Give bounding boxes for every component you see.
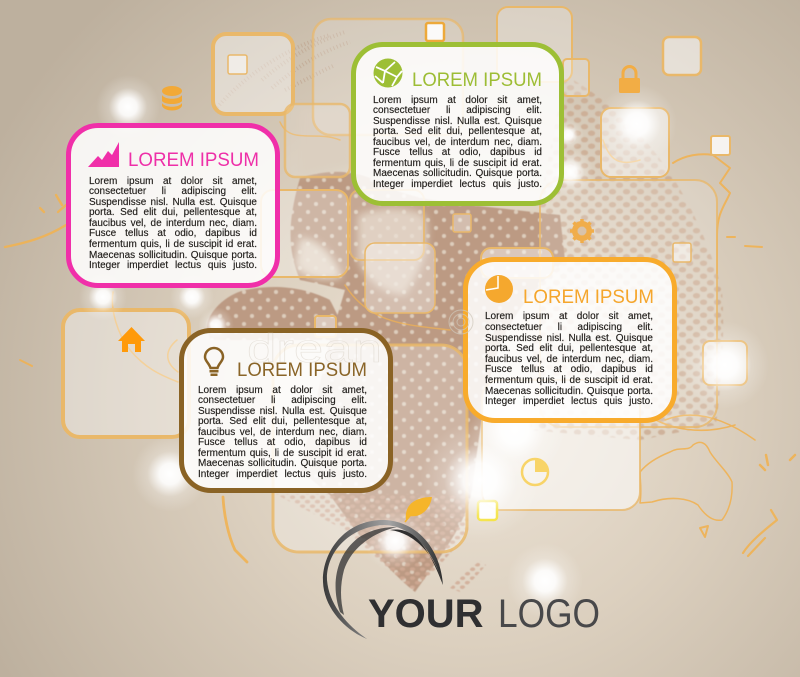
- text block: green: Lorem ipsum at dolor sit amet,: [373, 95, 542, 106]
- text block: green: faucibus vel, de interdum nec, diam.: [373, 137, 542, 148]
- text block: pink: fermentum quis, li de suscipit id erat.: [89, 239, 257, 250]
- text block: green: Suspendisse nisl. Nulla est. Quisque: [373, 116, 542, 127]
- text block: pink: Suspendisse nisl. Nulla est. Quisque: [89, 197, 257, 208]
- icon: globe: [374, 58, 402, 88]
- text block: pink: Lorem ipsum at dolor sit amet,: [89, 176, 257, 186]
- orange world map outlines: [5, 122, 795, 562]
- heading: green: LOREM IPSUM: [412, 69, 542, 91]
- text block: green: Fusce tellus at odio, dapibus id: [373, 147, 542, 158]
- text block: green: Maecenas sollicitudin. Quisque porta.: [373, 168, 542, 179]
- text block: green: [373, 95, 542, 190]
- translucent rounded tiles: [63, 7, 747, 552]
- text block: pink: faucibus vel, de interdum nec, diam.: [89, 218, 257, 229]
- watermark: drean: [247, 327, 382, 371]
- icon: gear: [570, 219, 594, 243]
- icon: padlock: [619, 67, 640, 93]
- text block: orange: Lorem ipsum at dolor sit amet,: [485, 311, 653, 322]
- logo text: YOUR: [368, 592, 484, 636]
- panel: green card: [351, 42, 564, 206]
- text block: green: porta. Sed elit dui, pellentesque at,: [373, 126, 542, 137]
- text block: brown: Integer imperdiet lectus quis justo.: [198, 469, 367, 480]
- text block: pink: porta. Sed elit dui, pellentesque at,: [89, 207, 257, 218]
- text block: orange: porta. Sed elit dui, pellentesque at,: [485, 343, 653, 354]
- text block: pink: Maecenas sollicitudin. Quisque porta.: [89, 250, 257, 261]
- text block: brown: fermentum quis, li de suscipit id erat.: [198, 448, 367, 459]
- text block: brown: Fusce tellus at odio, dapibus id: [198, 437, 367, 448]
- halftone globe: [207, 75, 723, 592]
- text block: orange: fermentum quis, li de suscipit id erat.: [485, 375, 653, 386]
- icon: mountain chart: [88, 142, 119, 167]
- icon: leaf: [405, 497, 432, 522]
- icon: pie chart: [485, 275, 513, 303]
- pale sea patches: [295, 108, 428, 295]
- logo swoosh: [323, 520, 443, 639]
- text block: orange: faucibus vel, de interdum nec, diam.: [485, 354, 653, 365]
- heading: brown: LOREM IPSUM: [237, 359, 367, 381]
- panel: pink card: [66, 123, 280, 288]
- text block: orange: Integer imperdiet lectus quis justo.: [485, 396, 653, 407]
- icon: house: [118, 327, 145, 352]
- light flares: [79, 75, 769, 619]
- logo text: LOGO: [498, 592, 600, 636]
- icon: pie ring: [522, 459, 548, 485]
- text block: green: Integer imperdiet lectus quis justo.: [373, 179, 542, 190]
- text block: pink: consectetuer li adipiscing elit.: [89, 186, 257, 197]
- text block: orange: Suspendisse nisl. Nulla est. Quisque: [485, 333, 653, 344]
- text block: orange: Maecenas sollicitudin. Quisque porta.: [485, 386, 653, 397]
- icon: database: [162, 86, 182, 110]
- text block: brown: Suspendisse nisl. Nulla est. Quisque: [198, 406, 367, 417]
- text block: brown: porta. Sed elit dui, pellentesque at,: [198, 416, 367, 427]
- text block: brown: faucibus vel, de interdum nec, diam.: [198, 427, 367, 438]
- text block: green: consectetuer li adipiscing elit.: [373, 105, 542, 116]
- text block: pink: Fusce tellus at odio, dapibus id: [89, 228, 257, 239]
- heading: pink: LOREM IPSUM: [128, 149, 259, 171]
- text block: orange: Fusce tellus at odio, dapibus id: [485, 364, 653, 375]
- text block: green: fermentum quis, li de suscipit id erat.: [373, 158, 542, 169]
- icon: light bulb: [204, 346, 224, 376]
- text block: orange: [485, 311, 653, 407]
- text block: brown: consectetuer li adipiscing elit.: [198, 395, 367, 406]
- text block: pink: [89, 176, 257, 271]
- hatched globe edge: [215, 32, 350, 110]
- text block: brown: Maecenas sollicitudin. Quisque porta.: [198, 458, 367, 469]
- logo text: [368, 592, 600, 636]
- panel: orange card: [463, 257, 677, 423]
- text block: brown: [198, 385, 367, 480]
- heading: orange: LOREM IPSUM: [523, 286, 654, 308]
- text block: brown: Lorem ipsum at dolor sit amet,: [198, 385, 367, 396]
- panel: brown card: [179, 328, 393, 493]
- text block: pink: Integer imperdiet lectus quis justo.: [89, 260, 257, 271]
- text block: orange: consectetuer li adipiscing elit.: [485, 322, 653, 333]
